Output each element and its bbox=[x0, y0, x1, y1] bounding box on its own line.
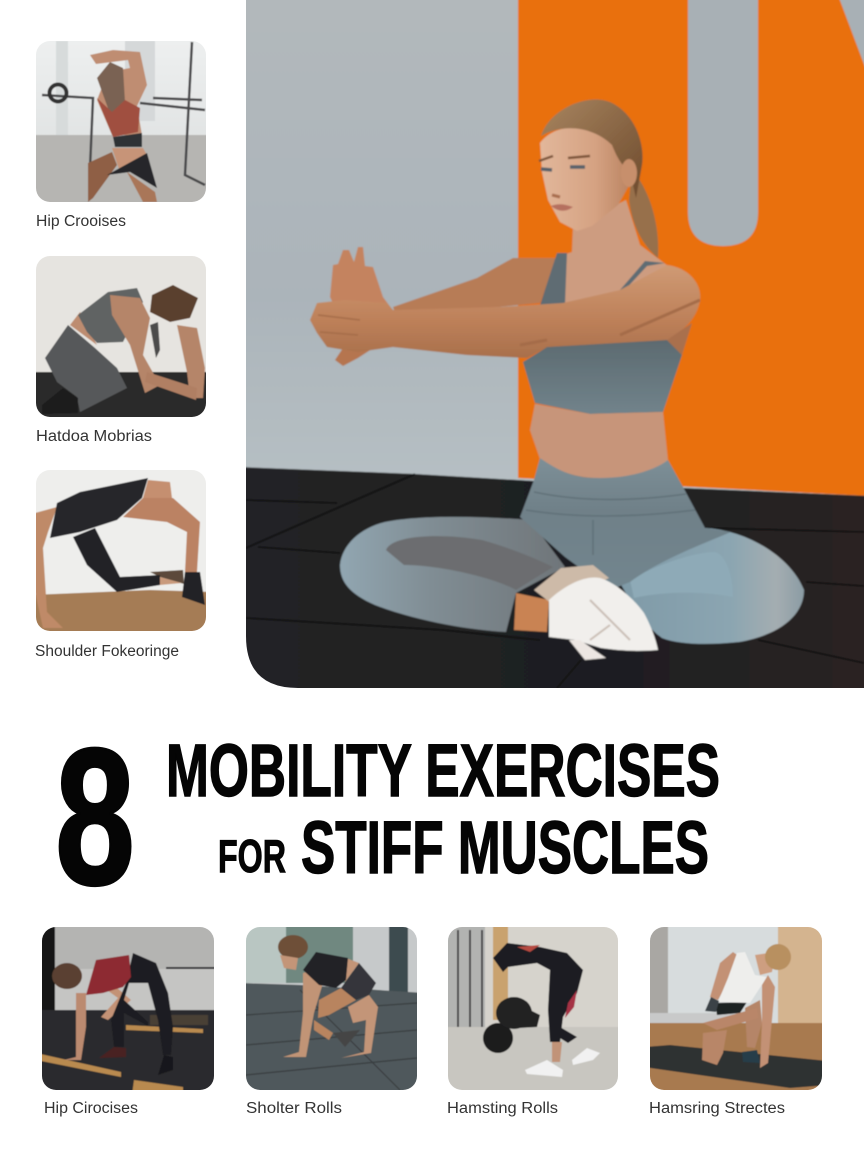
left thumbnail 3: shoulder exercise bbox=[36, 470, 206, 631]
woman: sneakers bbox=[534, 565, 658, 660]
big number 8: 8 bbox=[55, 708, 135, 926]
bottom thumbnail 4: hamstring stretches bbox=[650, 927, 822, 1090]
ponytail bbox=[629, 170, 658, 258]
left thumbnail 2: hamstring mobility bbox=[36, 256, 206, 417]
woman: midriff bbox=[530, 404, 668, 478]
gym floor mats bbox=[240, 467, 864, 695]
hero photo: woman stretching seated on gym mat bbox=[240, 0, 864, 695]
woman: crop top bbox=[523, 340, 682, 414]
woman: torso behind arm bbox=[667, 323, 692, 355]
woman: bra straps bbox=[540, 253, 665, 305]
label: Hatdoa Mobrias: Hatdoa Mobrias bbox=[36, 428, 152, 445]
woman: back hand bbox=[330, 246, 389, 305]
wall and orange mural bbox=[240, 0, 864, 500]
label: Hip Cirocises: Hip Cirocises bbox=[44, 1100, 138, 1117]
bottom thumbnail 3: hamstring rolls bbox=[448, 927, 618, 1090]
title line 2: FOR bbox=[218, 830, 286, 882]
label: Shoulder Fokeoringe: Shoulder Fokeoringe bbox=[35, 643, 179, 660]
woman: ankle bbox=[514, 593, 549, 632]
bottom thumbnail 1: hip circles bbox=[42, 927, 214, 1090]
label: Sholter Rolls: Sholter Rolls bbox=[246, 1100, 342, 1117]
title line 2 bbox=[218, 806, 709, 889]
bottom thumbnail 2: shoulder rolls bbox=[246, 927, 417, 1090]
woman: leggings bbox=[340, 458, 804, 644]
label: Hip Crooises: Hip Crooises bbox=[36, 213, 126, 230]
woman: near arm and hand bbox=[310, 265, 700, 366]
woman: head bbox=[539, 99, 643, 231]
woman: neck and chest bbox=[564, 199, 668, 303]
left thumbnail 1: hip exercise bbox=[36, 41, 206, 202]
woman: far arm bbox=[392, 256, 556, 311]
label: Hamsring Strectes: Hamsring Strectes bbox=[649, 1100, 785, 1117]
label: Hamsting Rolls: Hamsting Rolls bbox=[447, 1100, 558, 1117]
